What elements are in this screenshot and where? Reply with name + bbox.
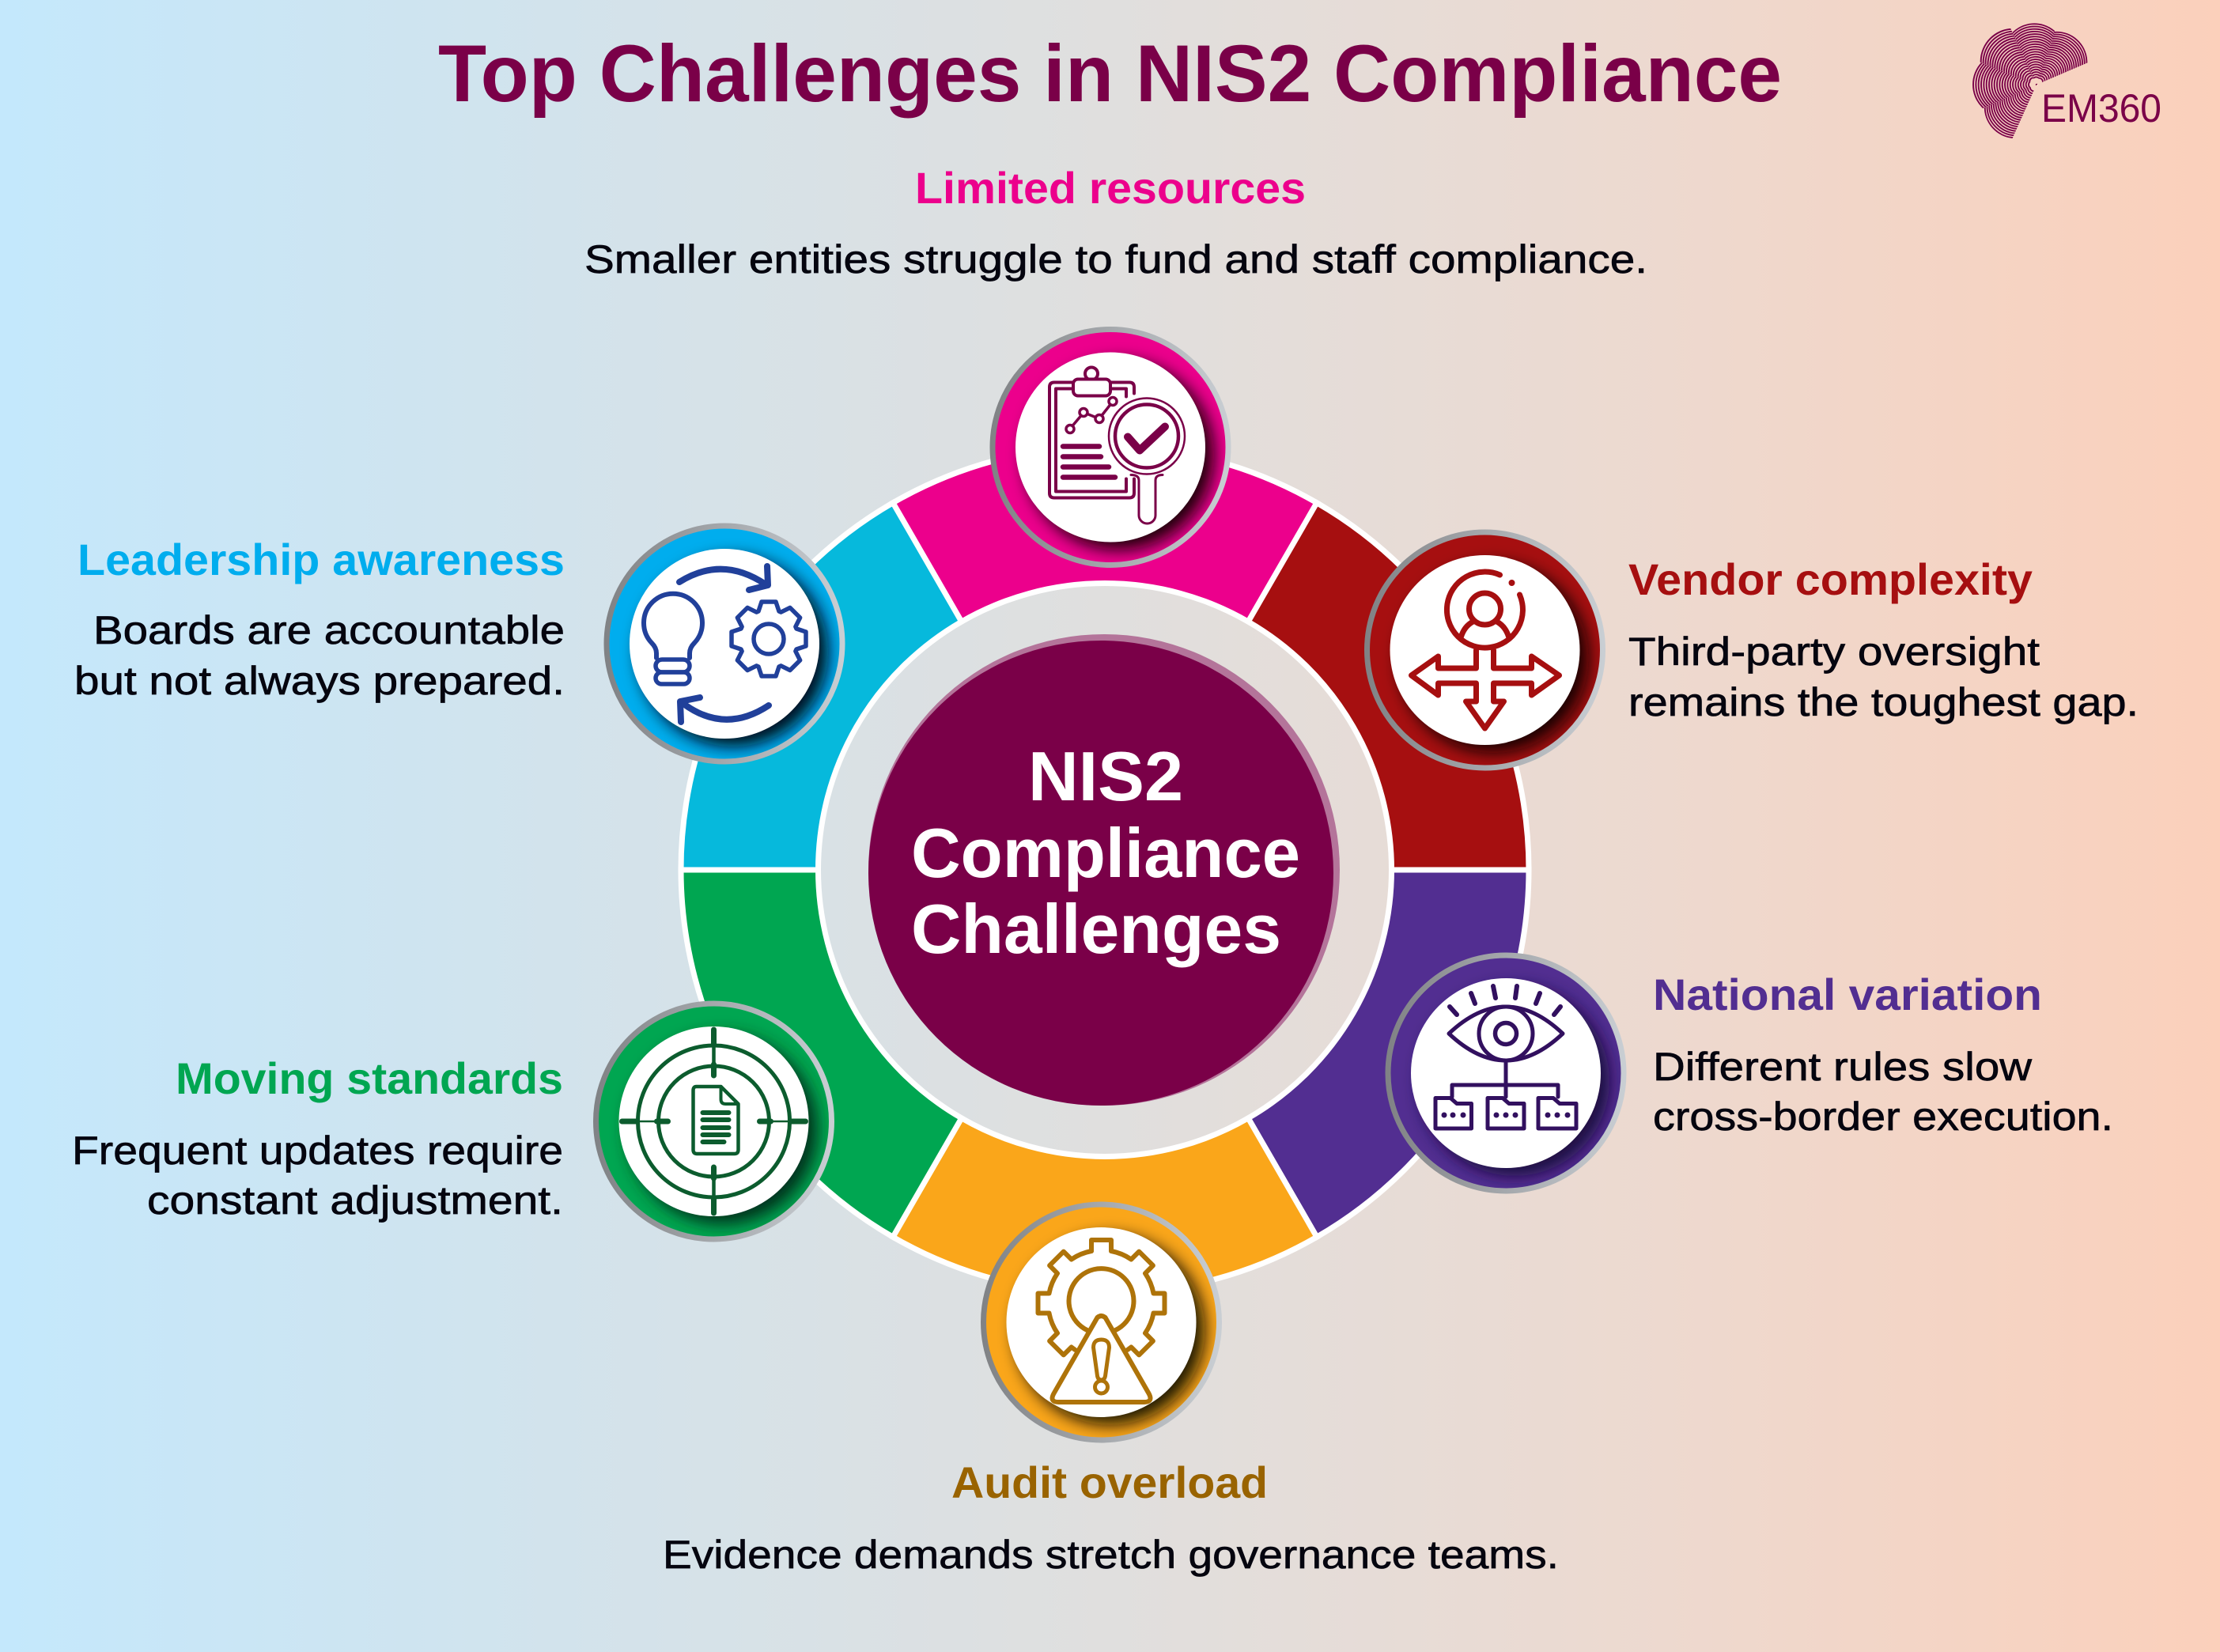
icon: gear with warning triangle	[1038, 1240, 1164, 1402]
heading: National variation	[1653, 970, 2042, 1019]
icon: target with document	[622, 1030, 805, 1213]
segment: green	[681, 870, 962, 1237]
text block: audit overload	[663, 1457, 1559, 1577]
description: but not always prepared.	[74, 659, 565, 703]
description: cross-border execution.	[1653, 1094, 2113, 1139]
heading: Leadership awareness	[78, 535, 565, 584]
description: Frequent updates require	[72, 1128, 563, 1173]
segment: orange	[893, 1118, 1317, 1294]
logo wordmark: EM360	[2041, 86, 2161, 130]
description: constant adjustment.	[147, 1178, 563, 1223]
description	[1653, 1045, 2113, 1139]
description	[72, 1128, 563, 1223]
segment: pink	[893, 446, 1317, 622]
medallion: moving standards	[596, 1004, 832, 1239]
heading: Moving standards	[176, 1053, 563, 1103]
text block: limited resources	[584, 163, 1647, 282]
centre circle with label	[868, 634, 1340, 1106]
centre label: NIS2	[1028, 737, 1183, 815]
heading: Audit overload	[951, 1457, 1268, 1507]
description: Boards are accountable	[93, 608, 565, 652]
logo mark: concentric arc fan	[1972, 23, 2088, 138]
title: Top Challenges in NIS2 Compliance	[438, 28, 1782, 119]
text block: national variation	[1653, 970, 2113, 1139]
heading: Limited resources	[915, 163, 1306, 213]
heading: Vendor complexity	[1628, 554, 2033, 604]
medallion: leadership awareness	[607, 526, 842, 762]
centre label	[911, 737, 1300, 968]
donut wheel of six segments	[681, 446, 1529, 1294]
medallion: vendor complexity	[1367, 532, 1602, 768]
description: remains the toughest gap.	[1628, 680, 2139, 724]
logo: EM360	[1972, 23, 2161, 138]
description	[74, 608, 565, 703]
segment: cyan	[681, 503, 962, 870]
text block: moving standards	[72, 1053, 563, 1223]
icon: clipboard with magnifier	[1049, 367, 1185, 524]
description: Evidence demands stretch governance teams.	[663, 1533, 1559, 1577]
text block: vendor complexity	[1628, 554, 2139, 724]
centre label: Challenges	[911, 890, 1281, 968]
icon: person with diverging arrows	[1411, 572, 1560, 728]
text block: leadership awareness	[74, 535, 565, 703]
description: Different rules slow	[1653, 1045, 2033, 1089]
medallion: national variation	[1388, 955, 1624, 1191]
centre label: Compliance	[911, 814, 1300, 892]
medallion: limited resources	[993, 329, 1228, 565]
description: Smaller entities struggle to fund and staff compliance.	[584, 237, 1647, 282]
description	[1628, 629, 2139, 724]
segment: red	[1248, 503, 1529, 870]
description: Third-party oversight	[1628, 629, 2040, 674]
icon: eye over folders	[1435, 986, 1576, 1128]
medallion: audit overload	[984, 1204, 1220, 1440]
icon: lightbulb, gear and cycle arrows	[644, 566, 806, 722]
segment: purple	[1248, 870, 1529, 1237]
